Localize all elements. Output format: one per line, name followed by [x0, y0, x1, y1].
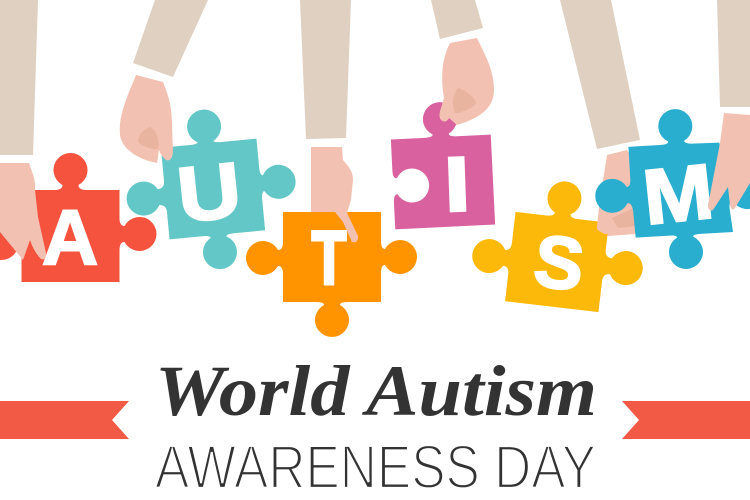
puzzle piece I: I [442, 140, 472, 228]
puzzle piece M: M [639, 149, 718, 242]
puzzle piece U: U [173, 146, 245, 239]
arm 2 sleeve [133, 0, 208, 77]
puzzle piece T [246, 212, 417, 337]
hand 4 holding I [440, 38, 494, 125]
puzzle piece A: A [42, 193, 98, 281]
puzzle piece S: S [530, 218, 589, 307]
arm 5 sleeve [560, 0, 640, 149]
arm 1 sleeve [0, 0, 38, 155]
hand 1 holding A [0, 163, 46, 260]
puzzle piece T: T [312, 216, 346, 301]
title: World Autism: World Autism [155, 351, 597, 431]
hand 2 holding U [120, 75, 173, 163]
subtitle: Awareness Day: AWARENESS DAY [155, 433, 596, 500]
hand 6 holding M [708, 113, 750, 210]
puzzle piece A [0, 153, 156, 282]
puzzle piece S [467, 172, 652, 317]
hand 5 holding S and M [597, 150, 650, 236]
left ribbon [0, 401, 129, 439]
arm 6 sleeve [717, 0, 750, 107]
puzzle piece U [119, 102, 303, 277]
arm 3 sleeve [300, 0, 351, 139]
finger of hand 5 over S [597, 200, 612, 234]
puzzle piece I [389, 100, 495, 229]
puzzle piece M [590, 104, 750, 274]
hand 3 holding T [311, 147, 358, 242]
right ribbon [622, 401, 750, 439]
arm 4 sleeve [431, 0, 483, 39]
